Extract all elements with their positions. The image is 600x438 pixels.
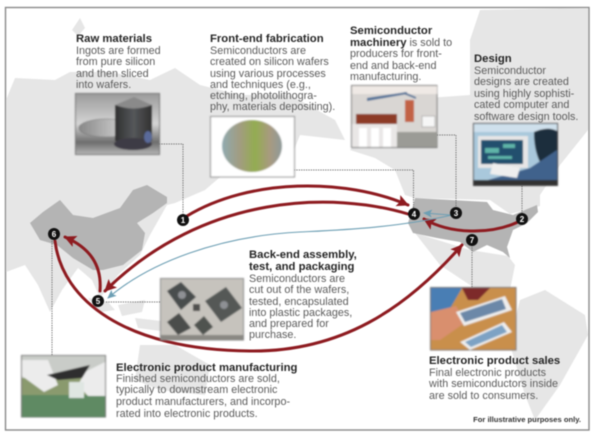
leader: front-end fabrication to node 4	[294, 170, 414, 208]
leader: product manufacturing to node 6	[51, 240, 53, 355]
text: raw materials: and then sliced	[76, 68, 149, 80]
text: semiconductor machinery: Semiconductor	[350, 25, 433, 37]
arrow: blue, node 3 to node 5	[108, 215, 452, 298]
text: front-end fabrication: using various processes	[210, 68, 326, 80]
text: raw materials: into wafers.	[76, 79, 131, 91]
leader: packaging to node 5	[105, 301, 160, 303]
text: semiconductor machinery: manufacturing.	[350, 71, 421, 83]
text: design	[474, 53, 578, 123]
arrow: node 6 to node 7	[55, 241, 462, 351]
text: design: using highly sophisti-	[474, 88, 575, 100]
node 2	[516, 213, 528, 225]
text: back-end assembly: and prepared for	[249, 318, 329, 330]
text: front-end fabrication	[210, 33, 335, 113]
text: electronic product sales: with semiconductors inside	[428, 378, 558, 390]
footnote: For illustrative purposes only.	[473, 415, 581, 424]
photo: product assembly	[22, 356, 106, 417]
photo: designer at computer	[474, 124, 558, 186]
text: semiconductor machinery: producers for front-	[350, 48, 442, 60]
text: electronic product manufacturing: rated into electronic products.	[116, 408, 258, 420]
text: back-end assembly: tested, encapsulated	[249, 296, 349, 308]
node 1: 1	[181, 216, 186, 225]
text: design: Design	[474, 53, 512, 65]
leader: product sales to node 7	[471, 245, 473, 287]
text: electronic product manufacturing: Electronic product manufacturing	[116, 362, 297, 374]
text: design: cated computer and	[474, 99, 569, 111]
node 7: 7	[470, 236, 475, 245]
node 3: 3	[454, 209, 459, 218]
text: electronic product manufacturing: typically to downstream electronic	[116, 384, 278, 396]
arrow: node 4 to node 5	[105, 202, 408, 291]
text: back-end assembly: test, and packaging	[249, 261, 355, 273]
node 4: 4	[412, 210, 417, 219]
node 1	[177, 214, 189, 226]
text: front-end fabrication: created on silicon wafers	[210, 56, 329, 68]
text: front-end fabrication: and techniques (e.g.,	[210, 79, 311, 91]
arrow: node 5 to node 6	[65, 237, 100, 291]
leader: design to node 2	[521, 186, 523, 213]
text: design: designs are created	[474, 76, 569, 88]
node 5	[92, 295, 104, 307]
node 7	[466, 234, 478, 246]
arrow: blue, node 3 to node 4	[424, 213, 450, 215]
text: electronic product manufacturing: product manufacturers, and incorpo-	[116, 396, 290, 408]
photo: semiconductor machine	[352, 86, 437, 148]
node 6: 6	[52, 230, 57, 239]
leader: raw materials to node 1	[159, 144, 183, 215]
text: back-end assembly: Semiconductors are	[249, 273, 345, 285]
text: back-end assembly: cut out of the wafers,	[249, 284, 349, 296]
text: back-end assembly	[249, 249, 357, 341]
node 2: 2	[520, 215, 525, 224]
node 6	[48, 228, 60, 240]
text: raw materials	[76, 33, 161, 91]
text: electronic product manufacturing	[116, 362, 297, 420]
text: back-end assembly: Back-end assembly,	[249, 249, 357, 261]
node 3	[450, 207, 462, 219]
text: front-end fabrication: phy, materials depositing).	[210, 101, 335, 113]
text: electronic product sales: Electronic product sales	[429, 355, 560, 367]
arrow: node 2 to node 4	[424, 219, 518, 231]
text: design: software design tools.	[474, 111, 578, 123]
photo: patterned wafer	[210, 116, 294, 177]
text: semiconductor machinery: machinery is sold to	[350, 37, 452, 49]
text: semiconductor machinery: end and back-end	[350, 60, 436, 72]
text: raw materials: Ingots are formed	[76, 45, 161, 57]
text: front-end fabrication: Semiconductors are	[210, 45, 306, 57]
text: electronic product manufacturing: Finished semiconductors are sold,	[116, 373, 280, 385]
node 5: 5	[96, 297, 101, 306]
text: electronic product sales	[428, 355, 560, 402]
arrow: node 1 to node 4	[187, 186, 408, 216]
photo: silicon ingot and wafer	[76, 94, 160, 154]
text: electronic product sales: are sold to consumers.	[429, 390, 538, 402]
node 4	[408, 208, 420, 220]
text: semiconductor machinery	[350, 25, 452, 83]
text: front-end fabrication: etching, photolithogra-	[210, 90, 317, 102]
map highlight: China	[30, 185, 167, 270]
text: electronic product sales: Final electronic products	[429, 367, 547, 379]
photo: chip packages	[160, 278, 244, 340]
text: design: Semiconductor	[474, 65, 546, 77]
text: raw materials: from pure silicon	[76, 56, 155, 68]
text: front-end fabrication: Front-end fabrication	[210, 33, 324, 45]
text: back-end assembly: into plastic packages,	[249, 307, 352, 319]
leader: machinery to node 3	[437, 135, 456, 208]
text: raw materials: Raw materials	[76, 33, 152, 45]
photo: smartphones in hand	[430, 288, 516, 350]
map highlight: United States	[408, 198, 538, 258]
text: back-end assembly: purchase.	[249, 329, 296, 341]
